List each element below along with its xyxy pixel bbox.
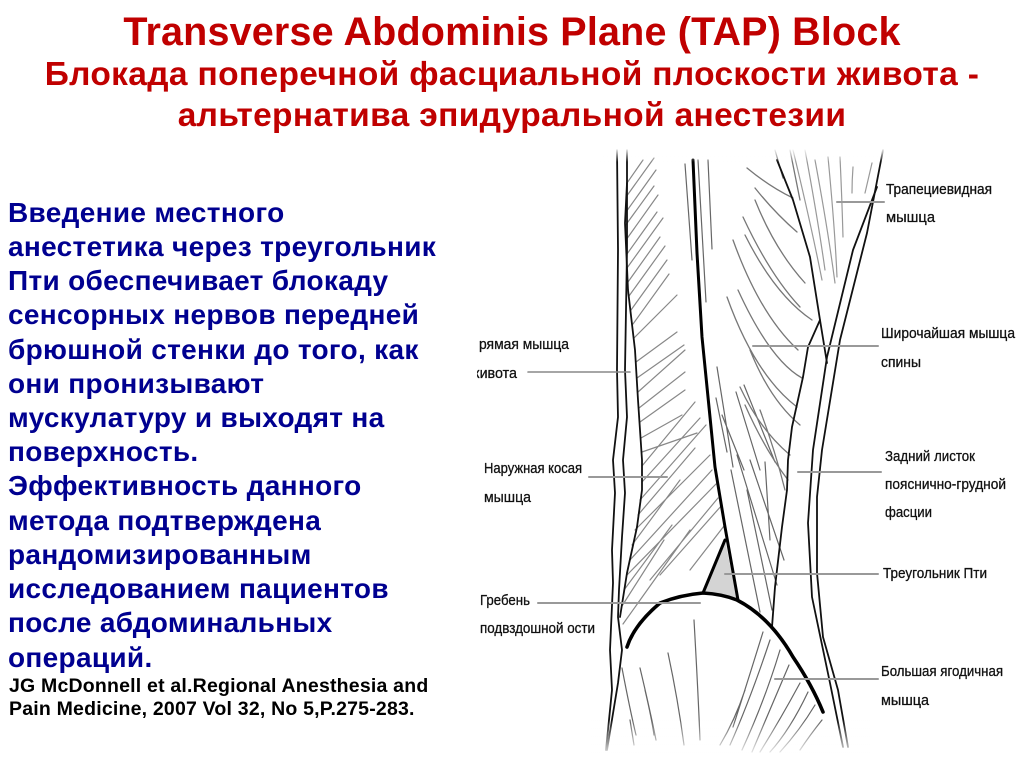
triangle of Petit [703,540,737,600]
outlines [606,150,883,750]
text block: description: после абдоминальных [8,606,333,638]
anatomical diagram [477,149,1016,752]
label: trapezius: Трапециевидная [886,181,992,198]
label: latissimus: спины [881,354,921,371]
hatching: trapezius fibers [793,150,872,283]
label: external oblique: мышца [484,489,532,506]
title: Transverse Abdominis Plane (TAP) Block [123,10,901,54]
text block: description [8,196,436,673]
label: thoracolumbar fascia: Задний листок [885,448,975,465]
label: rectus [477,340,631,378]
label: thoracolumbar fascia: пояснично-грудной [885,476,1006,493]
fade edges [590,720,870,760]
text block: description: брюшной стенки до того, как [8,334,419,364]
text block: description: анестетика через треугольник [8,230,436,262]
label: external oblique: Наружная косая [484,460,582,477]
label: triangle of Petit: Треугольник Пти [883,565,987,582]
text block: description: операций. [8,642,153,672]
label: thoracolumbar fascia [798,448,1006,521]
label: thoracolumbar fascia: фасции [885,504,932,521]
drawing: abdominal wall muscles [590,148,890,760]
label: external oblique [484,460,667,506]
hatching: lower fibers and gluteus [622,620,822,752]
label: trapezius [837,181,992,226]
text block: description: поверхность. [8,436,199,466]
label: trapezius: мышца [886,209,936,226]
label: iliac crest [480,592,700,637]
label: latissimus [753,325,1016,371]
text block: description: мускулатуру и выходят на [8,402,385,432]
text block: description: рандомизированным [8,538,312,570]
label: gluteus maximus: Большая ягодичная [881,663,1003,680]
citation [9,675,428,720]
text block: description: Эффективность данного [8,470,362,500]
citation: Pain Medicine, 2007 Vol 32, No 5,P.275-283. [9,698,415,720]
text block: description: метода подтверждена [8,504,321,536]
subtitle [45,56,979,134]
text block: description: они пронизывают [8,368,264,398]
thick line: triangle side [703,540,725,593]
text block: description: Введение местного [8,196,285,228]
hatching: transversus fibers [685,160,784,612]
label: iliac crest: подвздошной ости [480,620,595,637]
hatching: latissimus fibers [727,150,812,490]
subtitle: альтернатива эпидуральной анестезии [178,96,846,134]
text block: description: сенсорных нервов передней [8,298,419,330]
text block: description: исследованием пациентов [8,572,389,604]
thick line: iliac crest [627,593,823,712]
label: gluteus maximus: мышца [881,692,930,709]
label: rectus: рямая мышца [479,336,570,353]
label: latissimus: Широчайшая мышца [881,325,1016,342]
label: rectus: живота [470,365,518,382]
hatching: rectus and external oblique fibers [622,158,724,624]
label: gluteus maximus [775,663,1003,709]
subtitle: Блокада поперечной фасциальной плоскости живота - [45,56,979,93]
label: iliac crest: Гребень [480,592,530,609]
thick line: rectus border [693,160,738,600]
citation: JG McDonnell et al.Regional Anesthesia and [9,675,428,697]
text block: description: Пти обеспечивает блокаду [8,264,388,296]
